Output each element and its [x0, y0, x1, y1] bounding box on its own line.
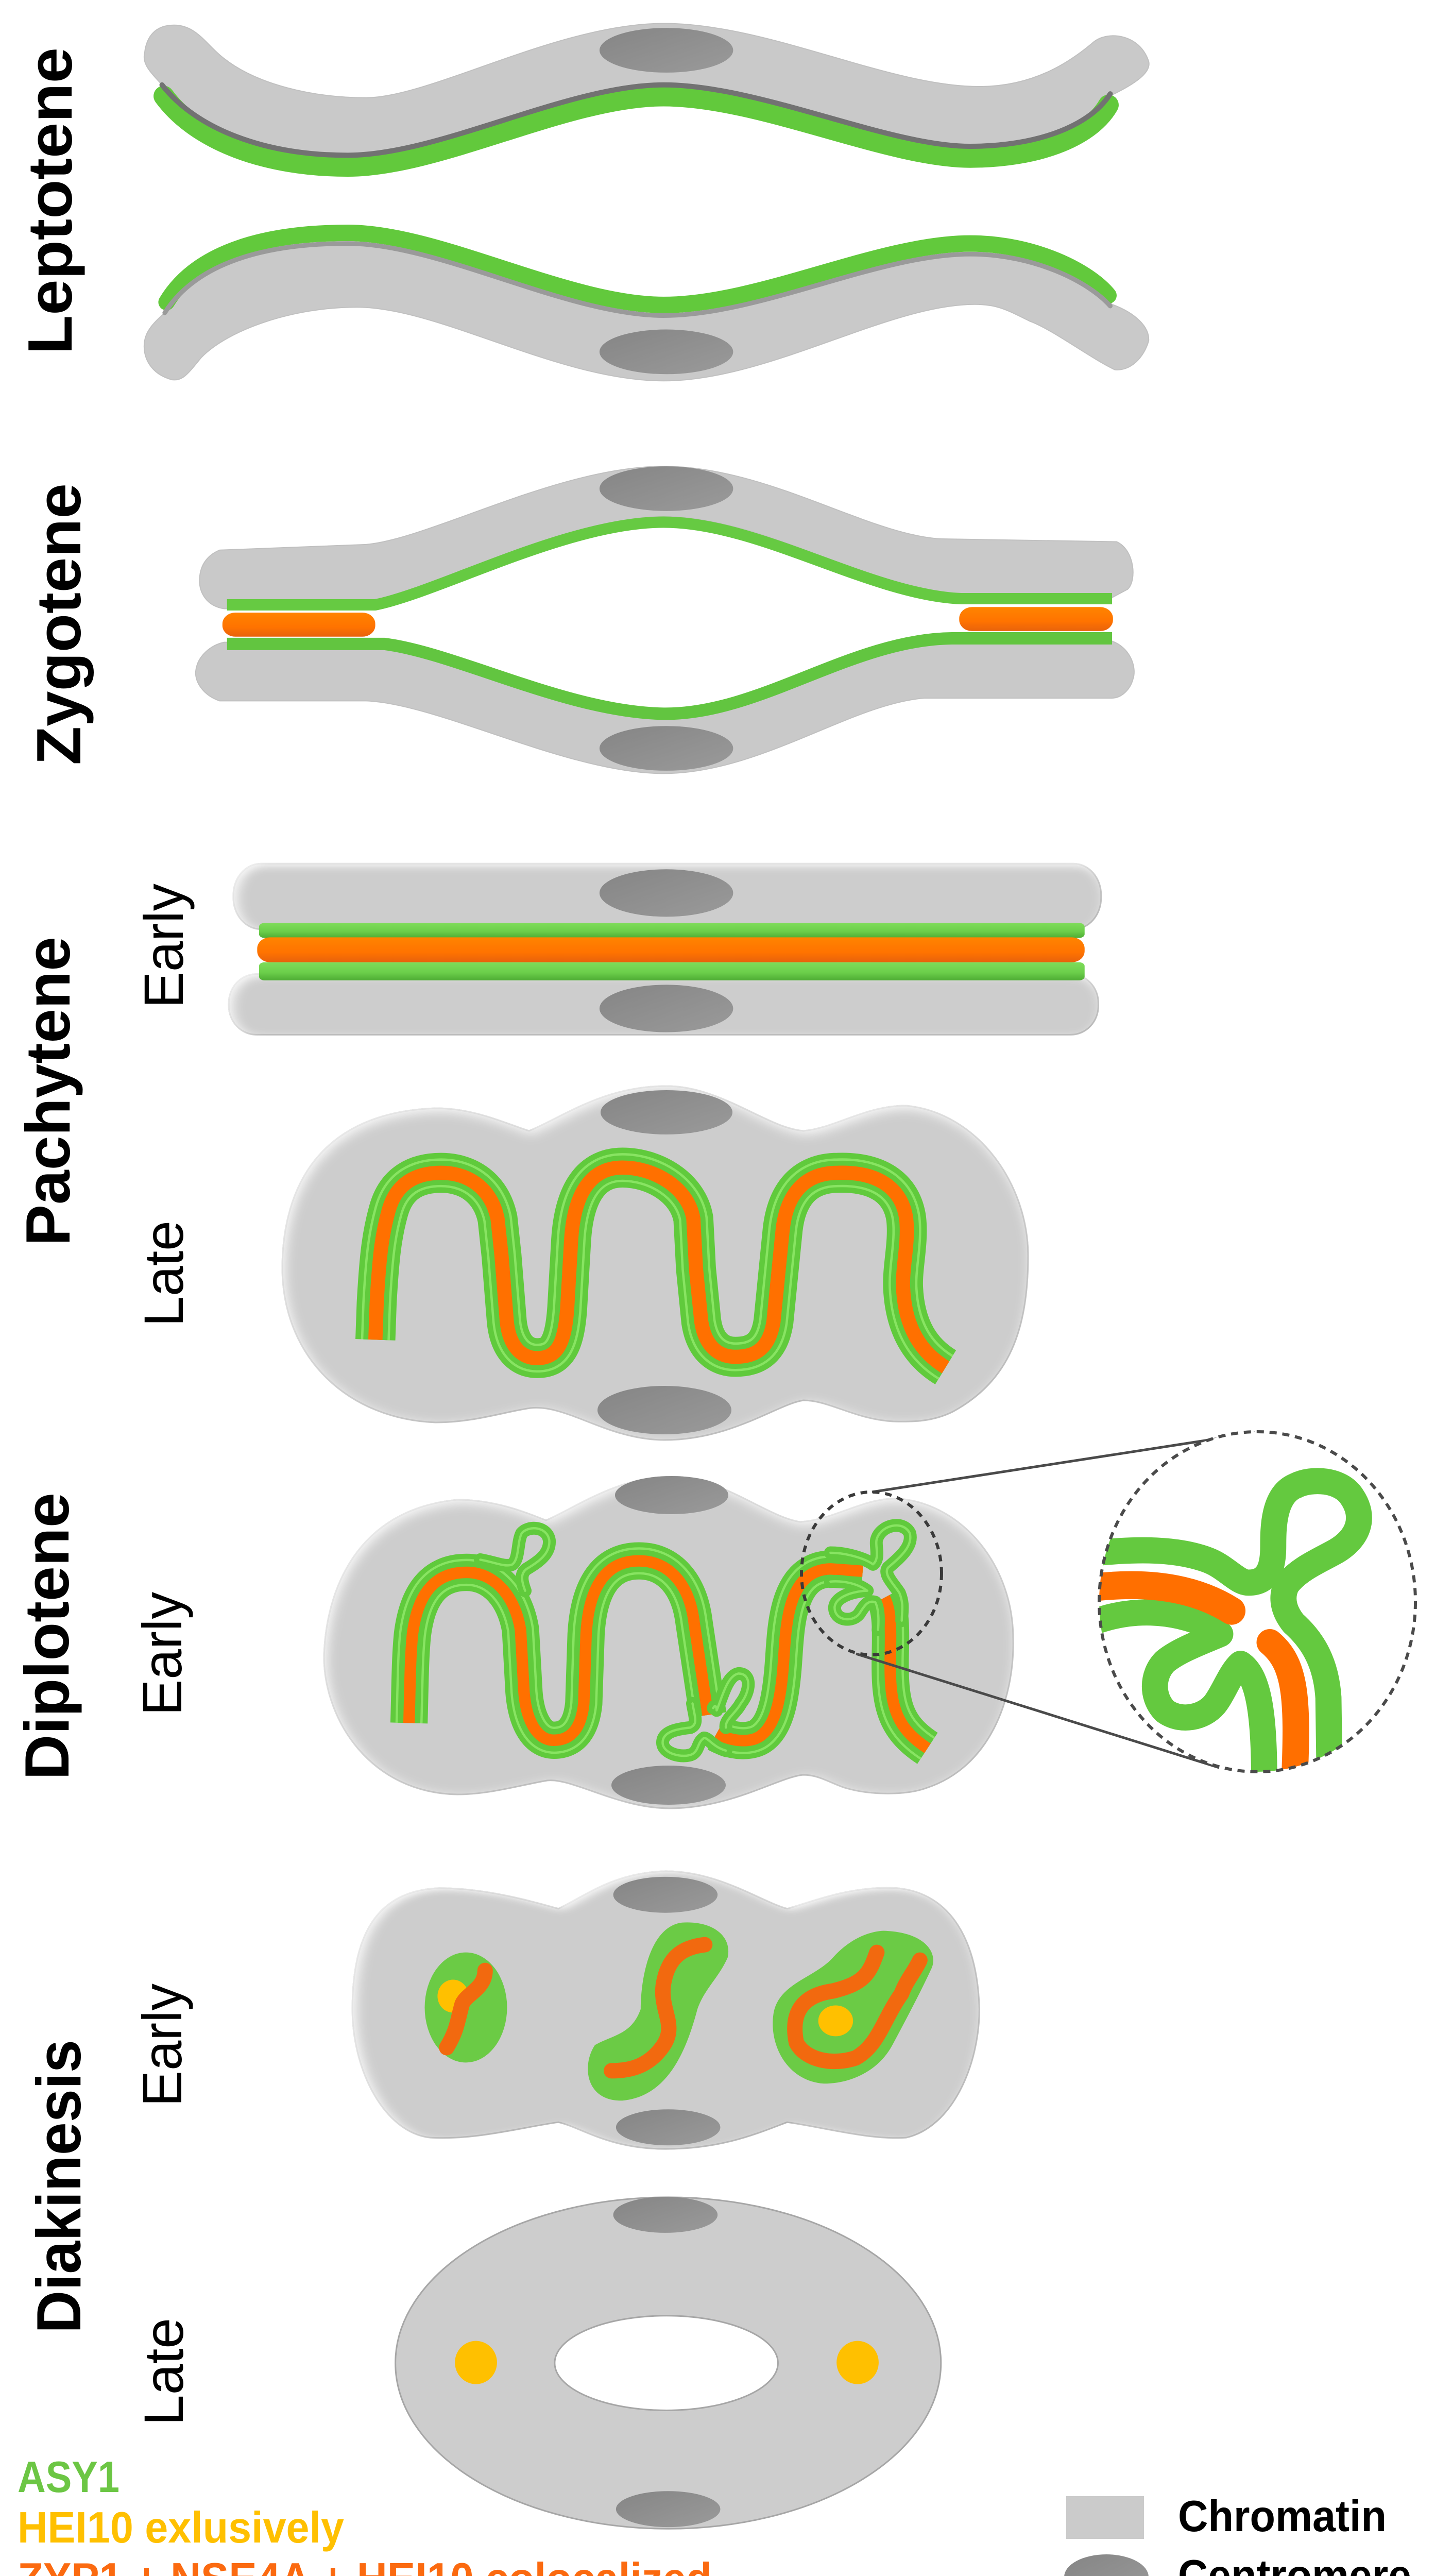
swatch: centromere [1064, 2554, 1149, 2576]
bivalent 3 [773, 1931, 933, 2083]
centromere: bottom [600, 985, 733, 1032]
chromatin: top homolog [144, 24, 1149, 155]
ASY1 axis: top homolog [164, 96, 1108, 166]
centromere: bottom [616, 2109, 720, 2145]
centromere: top [613, 2197, 717, 2233]
swatch: chromatin [1066, 2496, 1144, 2539]
zoom guide lines [856, 1433, 1255, 1768]
stage: Leptotene [144, 24, 1149, 381]
chromatin body [324, 1477, 1013, 1808]
synapsed axes with desynapsis loops [409, 1526, 928, 1756]
synapsed segment: left [223, 613, 375, 637]
ASY1 axis: top [259, 923, 1085, 938]
label: Diakinesis Early: Early [131, 1984, 193, 2107]
ASY1 axis: bottom [259, 962, 1085, 980]
label: Diakinesis: Diakinesis [24, 2040, 94, 2333]
legend: structures [1064, 2492, 1411, 2576]
chromatin ring [396, 2197, 941, 2529]
stage: Pachytene late [282, 1086, 1028, 1440]
centromere: bottom homolog [600, 726, 733, 771]
legend: proteins [18, 2453, 712, 2576]
ASY1 axis: top homolog [227, 522, 1112, 605]
label: Pachytene Early: Early [132, 884, 195, 1008]
stage: Diakinesis late [396, 2197, 941, 2529]
label: Pachytene: Pachytene [13, 937, 83, 1246]
centromere: top [613, 1877, 717, 1913]
chromatin: bottom homolog [229, 974, 1098, 1035]
chromatin: top homolog [199, 466, 1133, 609]
dashed magnification circle: source [801, 1492, 942, 1655]
stage: Zygotene [196, 466, 1134, 773]
chromatin: top homolog [233, 863, 1101, 929]
ASY1 axis: bottom homolog [166, 233, 1108, 305]
centromere: top homolog [600, 466, 733, 511]
legend text: ASY1: ASY1 [18, 2453, 119, 2502]
axis shadow: top homolog [162, 85, 1111, 155]
stage: Diakinesis early [352, 1871, 979, 2149]
HEI10 focus: left [455, 2341, 497, 2384]
chromatin body [282, 1086, 1028, 1440]
centromere: bottom homolog [600, 330, 733, 374]
label: Diplotene: Diplotene [12, 1493, 82, 1780]
stage: Pachytene early [229, 863, 1101, 1035]
centromere: top [615, 1476, 728, 1514]
synapsed segment: right [959, 607, 1113, 631]
centromere: top [601, 1090, 732, 1134]
label: Diplotene Early: Early [131, 1592, 193, 1716]
centromere: top [600, 869, 733, 917]
chromatin: bottom homolog [144, 244, 1149, 381]
chromatin: bottom homolog [196, 641, 1134, 773]
centromere: bottom [597, 1386, 731, 1434]
stage: Diplotene early [324, 1432, 1415, 1808]
ASY1 axis: bottom homolog [227, 638, 1112, 714]
bivalent 2 [588, 1922, 728, 2100]
bivalent 1 [425, 1953, 507, 2062]
legend text: HEI10: HEI10 exlusively [18, 2503, 344, 2552]
substage labels [131, 884, 195, 2426]
HEI10 focus: right [836, 2341, 879, 2384]
inset: magnified desynapsis site [1091, 1432, 1415, 1778]
centromere: bottom [611, 1766, 726, 1805]
stage labels [12, 47, 94, 2333]
label: Diakinesis Late: Late [132, 2318, 195, 2426]
axis shadow: bottom homolog [165, 244, 1111, 315]
serpentine synapsed axis [375, 1167, 946, 1367]
centromere: top homolog [600, 28, 733, 73]
label: Pachytene Late: Late [132, 1221, 195, 1327]
label: Leptotene: Leptotene [15, 47, 85, 354]
ZYP1 synaptonemal band [257, 937, 1085, 962]
chromatin body [352, 1871, 979, 2149]
centromere: bottom [616, 2491, 720, 2527]
label: Zygotene: Zygotene [24, 483, 94, 765]
legend text: Chromatin: Chromatin [1178, 2492, 1387, 2541]
